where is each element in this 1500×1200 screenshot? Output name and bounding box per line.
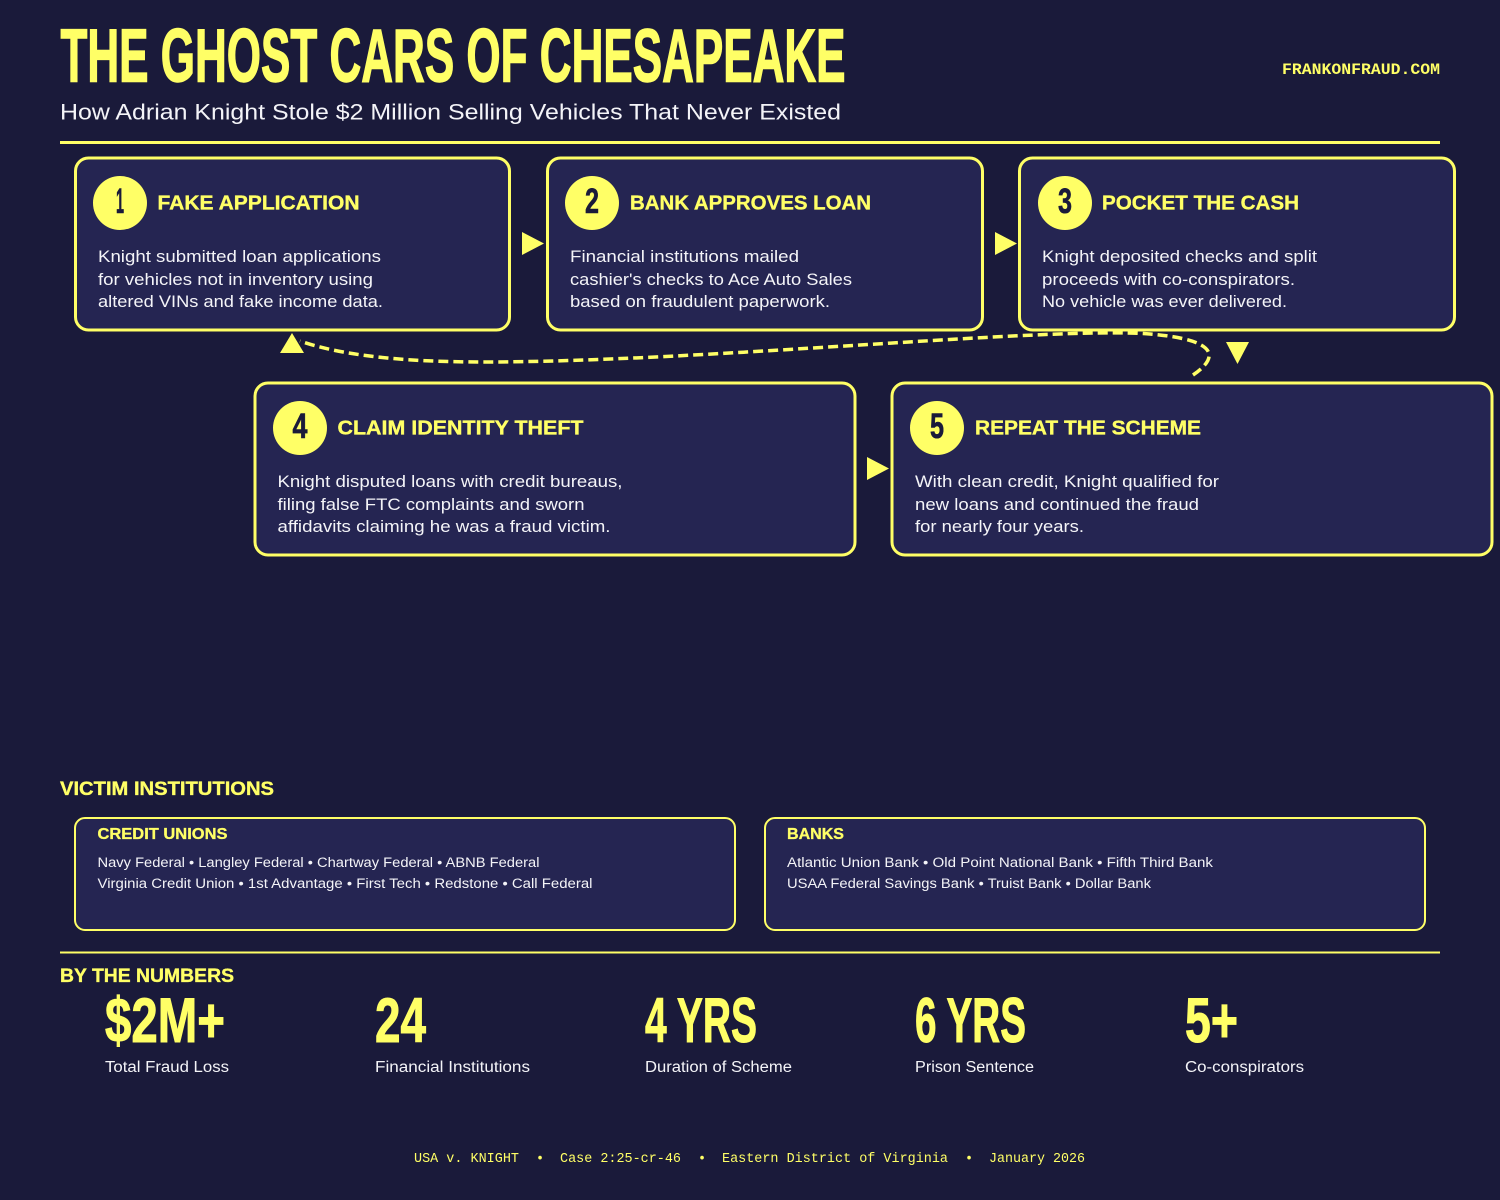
number badge 1: [93, 176, 147, 230]
body text: [98, 247, 383, 311]
footer: •: [536, 1152, 544, 1167]
stat: prison sentence: [915, 986, 1034, 1076]
body text: [1042, 247, 1317, 311]
number badge 5: 5: [930, 407, 944, 446]
body text: new loans and continued the fraud: [915, 495, 1199, 514]
stat: total fraud loss: $2M+: [105, 986, 225, 1056]
stat: prison sentence: 6 YRS: [915, 986, 1026, 1056]
title: THE GHOST CARS OF CHESAPEAKE: [60, 14, 845, 98]
body text: for vehicles not in inventory using: [98, 270, 373, 289]
number badge 1: 1: [116, 182, 124, 221]
body text: No vehicle was ever delivered.: [1042, 292, 1287, 311]
body text: Knight submitted loan applications: [98, 247, 381, 266]
body text: Knight deposited checks and split: [1042, 247, 1317, 266]
body text: With clean credit, Knight qualified for: [915, 472, 1219, 491]
subtitle: How Adrian Knight Stole $2 Million Selling Vehicles That Never Existed: [60, 100, 841, 124]
heading: FAKE APPLICATION: [158, 192, 360, 214]
body text: proceeds with co-conspirators.: [1042, 270, 1295, 289]
list of credit unions: Virginia Credit Union • 1st Advantage • First Tech • Redstone • Call Federal: [98, 876, 592, 891]
body text: Financial institutions mailed: [570, 247, 799, 266]
stat: co-conspirators: 5+: [1185, 986, 1238, 1056]
body text: for nearly four years.: [915, 517, 1084, 536]
number badge 2: [565, 176, 619, 230]
stat: financial institutions: 24: [375, 986, 426, 1056]
body text: based on fraudulent paperwork.: [570, 292, 830, 311]
number badge 3: [1038, 176, 1092, 230]
stat: total fraud loss: Total Fraud Loss: [105, 1059, 229, 1076]
panel: banks: [765, 818, 1425, 930]
heading: victim institutions: VICTIM INSTITUTIONS: [60, 779, 274, 800]
subheading: CREDIT UNIONS: [98, 826, 228, 843]
footer: Case 2:25-cr-46: [560, 1152, 681, 1167]
body text: affidavits claiming he was a fraud victim.: [278, 517, 610, 536]
body text: altered VINs and fake income data.: [98, 292, 383, 311]
body text: filing false FTC complaints and sworn: [278, 495, 584, 514]
number badge 5: [910, 401, 964, 455]
list of credit unions: Navy Federal • Langley Federal • Chartway Federal • ABNB Federal: [98, 855, 540, 870]
panel: step 5 repeat the scheme: [892, 383, 1492, 555]
stat: prison sentence: Prison Sentence: [915, 1059, 1034, 1076]
stat: co-conspirators: [1185, 986, 1304, 1076]
heading: CLAIM IDENTITY THEFT: [338, 418, 584, 440]
list of banks: [787, 855, 1213, 891]
arrow: loop head up: [280, 333, 304, 353]
stat: financial institutions: Financial Institutions: [375, 1059, 530, 1076]
body text: Knight disputed loans with credit bureaus,: [278, 472, 622, 491]
number badge 4: 4: [292, 407, 308, 446]
list of credit unions: [98, 855, 592, 891]
stat: duration of scheme: Duration of Scheme: [645, 1059, 792, 1076]
heading: REPEAT THE SCHEME: [975, 418, 1201, 440]
number badge 4: [273, 401, 327, 455]
footer: •: [965, 1152, 973, 1167]
arrow: step 4 to 5: [867, 457, 889, 480]
panel: step 2 bank approves loan: [548, 158, 982, 330]
stat: co-conspirators: Co-conspirators: [1185, 1059, 1304, 1076]
footer: •: [698, 1152, 706, 1167]
footer: Eastern District of Virginia: [722, 1152, 948, 1167]
number badge 3: 3: [1058, 182, 1072, 221]
arrow: step 3 to 4: [1226, 342, 1249, 364]
body text: [570, 247, 852, 311]
subheading: BANKS: [787, 826, 844, 843]
arrow: step 1 to 2: [522, 232, 544, 255]
body text: [915, 472, 1219, 536]
stat: duration of scheme: 4 YRS: [645, 986, 757, 1056]
body text: cashier's checks to Ace Auto Sales: [570, 270, 852, 289]
heading: POCKET THE CASH: [1102, 192, 1299, 214]
footer: January 2026: [989, 1152, 1085, 1167]
heading: BANK APPROVES LOAN: [630, 192, 871, 214]
stat: duration of scheme: [645, 986, 792, 1076]
website credit: FRANKONFRAUD.COM: [1282, 61, 1440, 79]
stat: total fraud loss: [105, 986, 229, 1076]
footer: [414, 1152, 1085, 1167]
arrow: step 2 to 3: [995, 232, 1017, 255]
panel: step 1 fake application: [76, 158, 510, 330]
list of banks: USAA Federal Savings Bank • Truist Bank • Dollar Bank: [787, 876, 1151, 891]
stat: financial institutions: [375, 986, 530, 1076]
list of banks: Atlantic Union Bank • Old Point National Bank • Fifth Third Bank: [787, 855, 1213, 870]
body text: [278, 472, 622, 536]
arrow: dashed loop back to step 1: [300, 333, 1209, 375]
heading: by the numbers: BY THE NUMBERS: [60, 965, 234, 987]
footer: USA v. KNIGHT: [414, 1152, 519, 1167]
panel: step 3 pocket the cash: [1020, 158, 1454, 330]
number badge 2: 2: [585, 182, 599, 221]
panel: step 4 claim identity theft: [255, 383, 855, 555]
panel: credit unions: [75, 818, 735, 930]
